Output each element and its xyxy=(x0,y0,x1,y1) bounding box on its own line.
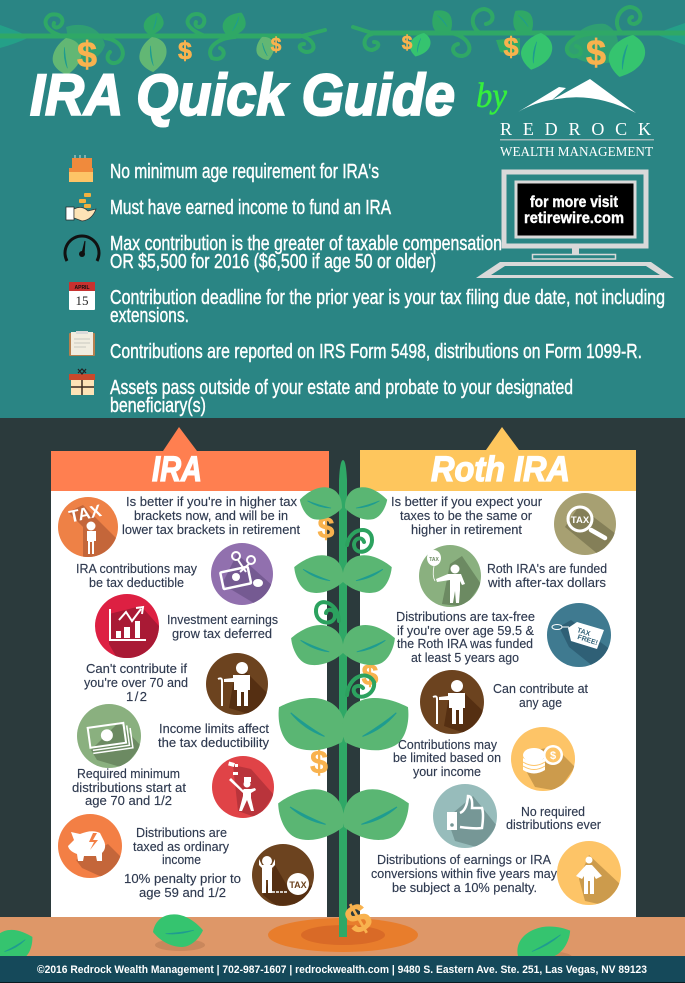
beanstalk plant xyxy=(266,460,421,937)
text: no required distributions: No required xyxy=(521,804,585,819)
top money vines: $ xyxy=(503,32,519,62)
Roth IRA header xyxy=(360,427,636,491)
footer bar xyxy=(0,956,685,983)
text: tax deductible: be tax deductible xyxy=(89,575,184,590)
dollar signs on beanstalk: $ xyxy=(310,744,328,780)
icon: man with tax balloon: TAX xyxy=(429,557,439,563)
text: same or higher taxes: higher in retirement xyxy=(411,522,522,537)
bullet: estate and probate: beneficiary(s) xyxy=(110,395,206,417)
text: contribute at any age: Can contribute at xyxy=(493,681,588,696)
text: income limits xyxy=(158,721,269,750)
text: 10% penalty xyxy=(124,871,241,900)
top money vines: $ xyxy=(271,35,282,56)
panel: IRA xyxy=(51,427,329,918)
Roth IRA header: Roth IRA xyxy=(431,450,570,489)
icon: clipboard xyxy=(69,331,95,356)
bullet: max contribution xyxy=(110,233,502,273)
bullet: contribution deadline xyxy=(110,287,665,327)
icon: older person with cane xyxy=(420,670,484,734)
text: limited by income: your income xyxy=(413,764,481,779)
logo wordmark xyxy=(500,119,654,159)
icon: scissors cutting money xyxy=(211,543,273,605)
icon: broken piggy bank xyxy=(58,814,122,878)
text: no required distributions xyxy=(506,804,602,832)
bullet: earned income: Must have earned income to fund an IRA xyxy=(110,197,392,219)
panel: Roth IRA xyxy=(360,427,636,918)
icon: tax magnifying glass xyxy=(554,493,616,555)
text: 10% penalty: age 59 and 1/2 xyxy=(139,885,226,900)
text: income limits: Income limits affect xyxy=(159,721,269,736)
background: teal header xyxy=(0,0,685,418)
dollar signs on beanstalk xyxy=(310,512,379,780)
by label: by xyxy=(476,76,507,115)
logo wordmark: WEALTH MANAGEMENT xyxy=(500,144,654,159)
icon: tax free tag xyxy=(547,603,611,667)
text: after-tax dollars: Roth IRA's are funded xyxy=(487,561,607,576)
top money vines: $ xyxy=(178,37,192,65)
text: same or higher taxes: Is better if you expect your xyxy=(391,494,543,509)
icon: gift box xyxy=(69,369,95,395)
text: over 70 and a half: you're over 70 and xyxy=(84,675,188,690)
computer callout: for more visit retirewire.com: for more visit xyxy=(530,194,619,211)
text: tax-free distributions: Distributions are tax-free xyxy=(396,609,535,624)
icon: speed gauge xyxy=(65,236,99,261)
bullet: contribution deadline: extensions. xyxy=(110,305,189,327)
text: tax deferred: grow tax deferred xyxy=(172,626,272,641)
text: same or higher taxes: taxes to be the same or xyxy=(400,508,533,523)
logo mountain mark xyxy=(518,79,636,113)
icon: person lifting tax xyxy=(58,497,120,557)
icon: man with tax balloon xyxy=(419,545,481,607)
text: contribute at any age: any age xyxy=(519,695,562,710)
text: tax deferred: Investment earnings xyxy=(167,612,278,627)
text: five year penalty: conversions within five years may xyxy=(371,866,557,881)
text: limited by income: Contributions may xyxy=(398,737,497,752)
text: taxed as ordinary income: Distributions are xyxy=(136,825,227,840)
dollar sign at stem base: $ xyxy=(338,894,379,943)
dollar signs on beanstalk: $ xyxy=(318,512,335,545)
title: IRA Quick Guide xyxy=(30,63,455,128)
top money vines: $ xyxy=(77,34,97,75)
bullet: max contribution: OR $5,500 for 2016 ($6,500 if age 50 or older) xyxy=(110,251,436,273)
text: over 70 and a half: 1/2 xyxy=(126,689,147,704)
text: contribute at any age xyxy=(493,681,588,710)
icon: April 15 calendar xyxy=(69,282,95,310)
IRA white body xyxy=(51,491,327,918)
icon: stressed man with tax ball xyxy=(252,844,314,906)
top money vines: $ xyxy=(586,32,606,73)
top money vines: $ xyxy=(402,33,413,54)
text: higher tax brackets: brackets now, and will be in xyxy=(134,508,288,523)
text: income limits: the tax deductibility xyxy=(158,735,269,750)
text: same or higher taxes xyxy=(391,494,543,537)
bullet: max contribution: Max contribution is the greater of taxable compensation xyxy=(110,233,502,255)
text: tax-free distributions: if you're over age 59.5 & xyxy=(397,623,534,638)
dollar signs on beanstalk: $ xyxy=(362,659,379,692)
text: required minimum distributions: age 70 and 1/2 xyxy=(85,793,172,808)
ground strip xyxy=(0,917,685,956)
footer contact text: ©2016 Redrock Wealth Management | 702-987-1607 | redrockwealth.com | 9480 S. Eastern Ave. Ste. 251, Las Vegas, NV 89123 xyxy=(37,964,647,976)
IRA header xyxy=(51,427,329,491)
text: higher tax brackets xyxy=(122,494,300,537)
computer callout: for more visit retirewire.com xyxy=(476,172,674,278)
icon: rich man tossing money xyxy=(212,756,274,818)
bullet: estate and probate xyxy=(110,377,573,417)
text: tax deductible xyxy=(76,561,197,590)
background: dark lower section xyxy=(0,418,685,918)
text: tax-free distributions: at least 5 years ago xyxy=(411,650,519,665)
Roth IRA white body xyxy=(360,491,636,918)
text: taxed as ordinary income: income xyxy=(162,852,201,867)
icon: coins: $ xyxy=(550,750,556,762)
text: limited by income: be limited based on xyxy=(393,750,501,765)
text: limited by income xyxy=(393,737,501,779)
bullet: estate and probate: Assets pass outside of your estate and probate to your designated xyxy=(110,377,573,399)
icon: April 15 calendar: APRIL xyxy=(74,285,90,291)
icon: stressed man with tax ball: TAX xyxy=(289,880,307,890)
text: required minimum distributions: Required minimum xyxy=(77,766,180,781)
text: five year penalty xyxy=(371,852,557,895)
logo: Redrock Wealth Management xyxy=(500,79,654,159)
text: after-tax dollars: with after-tax dollars xyxy=(487,575,606,590)
text: five year penalty: be subject a 10% penalty. xyxy=(392,880,537,895)
top money vines xyxy=(0,5,685,82)
ground leaves xyxy=(0,913,577,970)
text: taxed as ordinary income xyxy=(133,825,229,867)
icon: birthday cake xyxy=(69,155,93,182)
icon: coins xyxy=(511,727,575,791)
text: over 70 and a half xyxy=(84,661,188,704)
text: tax-free distributions xyxy=(396,609,535,665)
icon: hand with coins xyxy=(66,193,96,221)
icon: thumbs up xyxy=(433,784,497,848)
IRA header: IRA xyxy=(152,450,202,489)
icon: growth chart xyxy=(95,594,159,658)
text: tax-free distributions: the Roth IRA was funded xyxy=(397,636,533,651)
icon: person with empty pockets xyxy=(557,841,621,905)
text: tax deferred xyxy=(167,612,278,641)
text: over 70 and a half: Can't contribute if xyxy=(86,661,187,676)
icon: stack of cash xyxy=(77,704,141,768)
text: after-tax dollars xyxy=(487,561,607,590)
text: taxed as ordinary income: taxed as ordinary xyxy=(133,839,229,854)
logo wordmark: REDROCK xyxy=(500,119,651,139)
icon: April 15 calendar: 15 xyxy=(76,293,88,308)
text: tax deductible: IRA contributions may xyxy=(76,561,197,576)
text: no required distributions: distributions ever xyxy=(506,817,602,832)
icon: tax free tag: TAX xyxy=(576,627,591,638)
icon: older person with cane xyxy=(206,653,268,715)
icon: person lifting tax: TAX xyxy=(67,501,104,526)
icon: tax free tag: FREE! xyxy=(576,634,599,647)
text: 10% penalty: 10% penalty prior to xyxy=(124,871,241,886)
text: higher tax brackets: Is better if you're in higher tax xyxy=(126,494,298,509)
soil mound xyxy=(268,918,418,952)
text: five year penalty: Distributions of earnings or IRA xyxy=(377,852,551,867)
bullet: no minimum age: No minimum age requirement for IRA's xyxy=(110,161,379,183)
text: higher tax brackets: lower tax brackets in retirement xyxy=(122,522,300,537)
text: required minimum distributions: distributions start at xyxy=(72,780,186,795)
icon: tax magnifying glass: TAX xyxy=(571,515,590,526)
computer callout: for more visit retirewire.com: retirewire.com xyxy=(524,210,624,227)
text: required minimum distributions xyxy=(72,766,186,808)
